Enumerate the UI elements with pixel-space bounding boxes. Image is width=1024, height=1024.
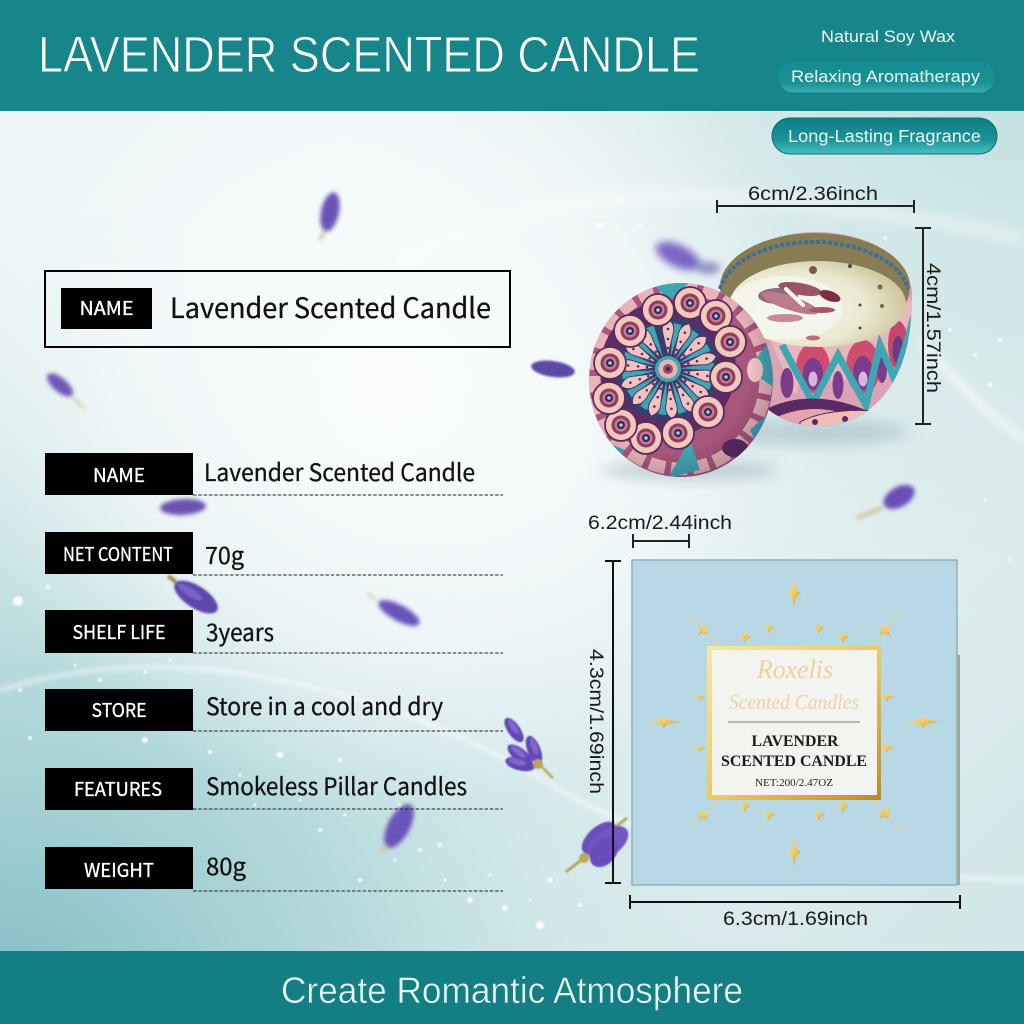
- label card: SCENTED CANDLE: [721, 753, 867, 770]
- row: name: NAME: [93, 461, 145, 488]
- footer band: [0, 951, 1024, 1024]
- candle tin: [602, 225, 920, 480]
- row: features: Smokeless Pillar Candles: [206, 767, 467, 802]
- wax surface: [727, 261, 906, 347]
- candle tin dimension: width: 6cm/2.36inch: [748, 183, 878, 205]
- lavender sprig: bottom centre: [566, 816, 634, 873]
- product name: LAVENDER: [752, 733, 839, 750]
- gift box dimension: height: [585, 561, 621, 883]
- gold stars: [644, 576, 942, 869]
- row: weight: 80g: [206, 847, 246, 882]
- tin rim: [720, 233, 910, 341]
- wick: [786, 289, 803, 305]
- dried petals: [758, 264, 884, 340]
- feature pill: relaxing aromatherapy: Relaxing Aromatherapy: [791, 67, 981, 86]
- gift box dimension: height: 4.3cm/1.69inch: [585, 649, 607, 794]
- candle tin dimension: height: [915, 228, 944, 424]
- row: shelf life: SHELF LIFE: [72, 618, 166, 645]
- candle tin dimension: width: [717, 183, 914, 213]
- name box value: Lavender Scented Candle: [170, 287, 491, 327]
- feature pill: long-lasting fragrance: [772, 118, 997, 154]
- row: weight: WEIGHT: [84, 856, 154, 883]
- feature pill: long-lasting fragrance: Long-Lasting Fragrance: [788, 126, 981, 146]
- gift box dimension: top label: 6.2cm/2.44inch: [588, 512, 732, 534]
- sub-brand script: Scented Candles: [729, 690, 859, 714]
- row: store: STORE: [92, 696, 146, 723]
- row: net content: [45, 532, 503, 575]
- title: LAVENDER SCENTED CANDLE: [38, 26, 700, 83]
- row: weight: [45, 847, 503, 891]
- outer pattern: [589, 282, 778, 478]
- gift box dimension: top label: [588, 512, 732, 548]
- row: net content: 70g: [205, 536, 244, 571]
- gift box: [632, 560, 960, 885]
- inner rosette: [600, 301, 736, 437]
- row: shelf life: [45, 610, 503, 653]
- candle tin dimension: height: 4cm/1.57inch: [922, 263, 944, 393]
- row: shelf life: 3years: [206, 613, 274, 648]
- name box: [45, 271, 510, 347]
- row: store: Store in a cool and dry: [206, 687, 443, 722]
- spec table: [45, 453, 503, 891]
- floating lavender buds: [43, 191, 919, 852]
- footer slogan: Create Romantic Atmosphere: [281, 970, 743, 1011]
- lavender sprig: right centre: [501, 715, 553, 778]
- gift box dimension: width: [630, 895, 960, 930]
- header band: [0, 0, 1024, 111]
- row: features: [45, 767, 503, 810]
- gift box dimension: width: 6.3cm/1.69inch: [723, 908, 868, 930]
- label card: [707, 646, 881, 800]
- tin body: [764, 232, 912, 426]
- row: net content: NET CONTENT: [63, 540, 173, 567]
- feature tag: natural soy wax: Natural Soy Wax: [821, 28, 956, 46]
- name box label: [61, 288, 152, 329]
- row: name: Lavender Scented Candle: [204, 453, 475, 488]
- row: features: FEATURES: [74, 775, 162, 802]
- brand script: Roxelis: [756, 655, 833, 684]
- feature pill: relaxing aromatherapy: [777, 60, 996, 93]
- row: store: [45, 687, 503, 731]
- name box label: NAME: [80, 294, 134, 321]
- medallion ring: [593, 287, 746, 454]
- net weight: NET:200/2.47OZ: [755, 777, 833, 789]
- row: name: [45, 453, 503, 495]
- candle tin lid: [589, 282, 778, 478]
